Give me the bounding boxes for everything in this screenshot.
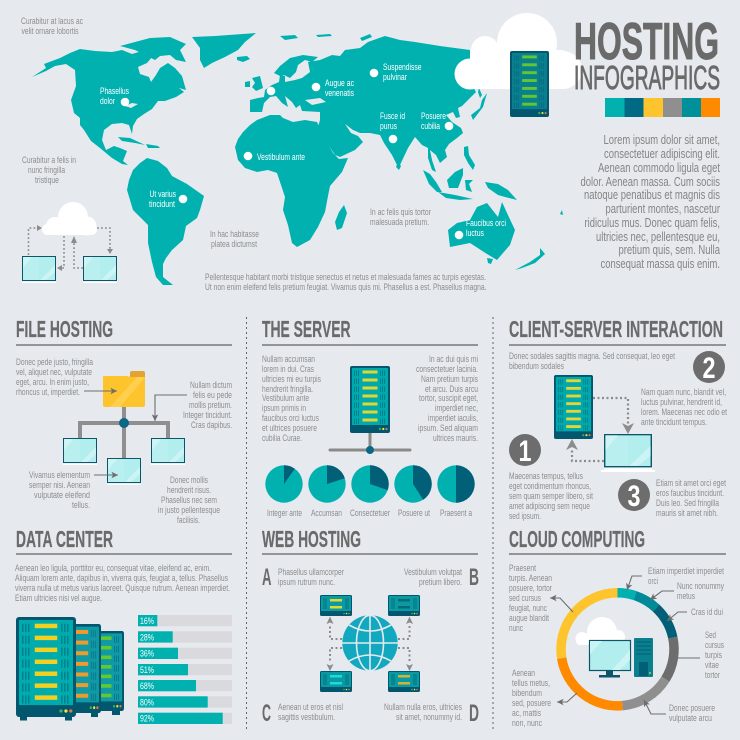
number badges: 3: [628, 480, 640, 513]
text blocks: vel, aliquet nec, vulputate: [16, 367, 92, 377]
text blocks: posuere, tortor: [509, 583, 552, 593]
text blocks: Integer tincidunt.: [183, 410, 232, 420]
map labels: venenatis: [325, 88, 354, 98]
letters: D: [469, 700, 479, 727]
letters: A: [262, 564, 272, 591]
icon: server on network: [330, 366, 410, 454]
text blocks: amet adipiscing sem neque: [509, 501, 590, 511]
icon: server racks: [16, 617, 124, 720]
text blocks: in justo pellentesque: [158, 505, 220, 515]
connector tree: [80, 405, 168, 459]
bar chart: 36%: [140, 649, 154, 659]
heading: web hosting: WEB HOSTING: [262, 526, 361, 552]
text blocks: Aenean: [512, 668, 535, 678]
text blocks: ultricies mi eu turpis: [262, 374, 321, 384]
text blocks: faucibus orci luctus: [262, 413, 319, 423]
icon: monitors: [63, 438, 185, 485]
text blocks: turpis. Aenean: [509, 573, 552, 583]
text blocks: ultrices mauris.: [433, 433, 478, 443]
text blocks: [509, 563, 724, 728]
pie labels: Praesent a: [440, 508, 472, 518]
text blocks: facilisis.: [177, 515, 200, 525]
text blocks: [16, 357, 232, 525]
text blocks: mollis pretium.: [189, 400, 232, 410]
pie labels: Posuere ut: [398, 508, 430, 518]
text blocks: turpis: [705, 650, 722, 660]
text blocks: orci: [648, 576, 658, 586]
pie labels: [267, 508, 472, 518]
text blocks: Nam pretium turpis: [421, 374, 478, 384]
text blocks: imperdiet nec,: [435, 403, 478, 413]
text blocks: et ultrices posuere: [262, 423, 317, 433]
pie labels: Consectetuer: [350, 508, 390, 518]
title: [574, 13, 720, 96]
text block: Aliquam lorem ante, dapibus in, viverra quis, feugiat a, tellus. Phasellus: [15, 573, 228, 583]
pie charts: [265, 465, 475, 503]
pie labels: Integer ante: [267, 508, 302, 518]
heading: file hosting: FILE HOSTING: [16, 316, 113, 342]
letters: [262, 564, 479, 727]
map labels: Ut varius: [150, 189, 176, 199]
bar chart: 51%: [140, 665, 154, 675]
colour swatches: [605, 98, 720, 117]
map labels: Augue ac: [325, 78, 354, 88]
panel: data center: [15, 526, 232, 724]
text blocks: semper nisi. Aenean: [29, 480, 90, 490]
text blocks: [509, 351, 727, 521]
text blocks: bibendum sodales: [509, 361, 564, 371]
text blocks: pretium libero.: [419, 577, 462, 587]
map labels: Fusce id: [380, 111, 405, 121]
text blocks: cursus: [705, 640, 724, 650]
map captions: Ut non enim eleifend felis pretium feugiat. Vivamus quis mi. Phasellus a est. Phasellus magna.: [205, 282, 486, 292]
text blocks: Nunc nonummy: [677, 581, 724, 591]
text blocks: lorem in dui. Cras: [262, 364, 314, 374]
map captions: malesuada pretium.: [370, 217, 429, 227]
text block: Etiam ultricies nisi vel augue.: [15, 593, 102, 603]
number badges: 2: [702, 352, 716, 385]
panel: cloud computing: [509, 526, 726, 728]
text blocks: mauris sit amet nibh.: [656, 508, 718, 518]
icon: server in big cloud: [454, 13, 582, 117]
arrows: [84, 391, 187, 475]
text blocks: cubilia Curae.: [262, 433, 302, 443]
text blocks: Phasellus ullamcorper: [278, 567, 344, 577]
text blocks: rhoncus ut, imperdiet.: [16, 387, 80, 397]
text blocks: tellus metus,: [512, 678, 550, 688]
text blocks: Nullam dictum: [190, 380, 232, 390]
text blocks: sem quam semper libero, sit: [509, 491, 593, 501]
text blocks: Sed: [705, 630, 716, 640]
map captions: In ac felis quis tortor: [370, 207, 431, 217]
text blocks: ipsum rutrum nunc.: [278, 577, 335, 587]
text blocks: Vivamus elementum: [29, 470, 90, 480]
text blocks: et arcu. Duis arcu: [425, 384, 478, 394]
column dividers: [246, 317, 493, 732]
number badges: 1: [518, 435, 532, 468]
map captions: Curabitur a felis in: [22, 155, 76, 165]
text blocks: augue blandit: [509, 613, 549, 623]
bar chart: 68%: [140, 681, 154, 691]
map captions: In hac habitasse: [210, 229, 259, 239]
icon: globe: [342, 615, 398, 671]
map labels: tincidunt: [149, 199, 175, 209]
bar chart: [138, 615, 232, 724]
text block: [15, 563, 230, 603]
text blocks: Vestibulum volutpat: [404, 567, 462, 577]
map captions: Pellentesque habitant morbi tristique senectus et netus et malesuada fames ac turpis egestas.: [205, 272, 486, 282]
icon: cloud and desktop computer: [576, 617, 653, 678]
bar chart: 92%: [140, 714, 154, 724]
text blocks: hendrerit risus.: [167, 485, 211, 495]
text blocks: [278, 567, 462, 722]
text blocks: Maecenas tempus, tellus: [509, 471, 583, 481]
map captions: Curabitur at lacus ac: [21, 16, 83, 26]
text blocks: non, nunc: [512, 718, 542, 728]
map labels: cubilia: [421, 121, 440, 131]
letters: B: [469, 564, 479, 591]
icon: folder: [103, 371, 145, 407]
text blocks: Nullam nulla eros, ultricies: [384, 702, 462, 712]
map labels: purus: [380, 121, 397, 131]
icon: cloud with two laptops: [22, 202, 117, 283]
text blocks: Donec posuere: [669, 703, 715, 713]
bar chart: 28%: [140, 632, 154, 642]
donut chart: [561, 593, 674, 706]
map labels: [100, 62, 506, 238]
text blocks: hendrerit fringilla.: [262, 384, 313, 394]
arrows: [550, 576, 700, 714]
map labels: dolor: [100, 96, 115, 106]
text blocks: In ac dui quis mi: [429, 354, 478, 364]
text blocks: feugiat, nunc: [509, 603, 547, 613]
text blocks: Vestibulum ante: [262, 393, 309, 403]
text blocks: eget condimentum rhoncus,: [509, 481, 591, 491]
text blocks: [262, 354, 478, 443]
text blocks: ipsum primis in: [262, 403, 306, 413]
panel: the server: [262, 316, 478, 518]
text blocks: eget, arcu. In enim justo,: [16, 377, 89, 387]
text blocks: tellus.: [72, 500, 90, 510]
map labels: Vestibulum ante: [257, 152, 305, 162]
text blocks: Cras id dui: [691, 607, 723, 617]
text blocks: Praesent: [509, 563, 536, 573]
panel: client-server interaction: [509, 316, 727, 521]
text blocks: tortor, suscipit eget,: [419, 393, 478, 403]
map labels: Phasellus: [100, 86, 129, 96]
letters: C: [262, 700, 271, 727]
text blocks: vitae: [705, 660, 719, 670]
text block: viverra nulla ut metus varius laoreet. Quisque rutrum. Aenean imperdiet.: [15, 583, 230, 593]
text blocks: Aenean ut eros et nisl: [278, 702, 343, 712]
icon: server and laptop exchange: [554, 375, 655, 472]
text blocks: Donec sodales sagittis magna. Sed consequat, leo eget: [509, 351, 675, 361]
text blocks: imperdiet iaculis,: [428, 413, 478, 423]
text blocks: tortor: [705, 670, 720, 680]
map captions: tristique: [35, 175, 59, 185]
text blocks: Duis leo. Sed fringilla: [656, 498, 719, 508]
map captions: [21, 16, 486, 292]
text blocks: sed cursus: [509, 593, 541, 603]
map captions: platea dictumst: [211, 239, 257, 249]
text blocks: sagittis vestibulum.: [278, 712, 335, 722]
bar chart: 80%: [140, 697, 154, 707]
map location dots: [121, 69, 463, 239]
text blocks: sed, posuere: [512, 698, 551, 708]
text blocks: sed ipsum.: [509, 511, 541, 521]
dotted links: [326, 616, 413, 671]
text blocks: metus: [677, 591, 695, 601]
text blocks: felis eu pede: [193, 390, 232, 400]
text blocks: ante tincidunt tempus.: [641, 417, 707, 427]
text blocks: vulputate eleifend: [34, 490, 90, 500]
text block: Aenean leo ligula, porttitor eu, consequat vitae, eleifend ac, enim.: [15, 563, 211, 573]
text blocks: ac, mattis: [512, 708, 541, 718]
text blocks: vulputate arcu: [669, 713, 712, 723]
heading: data center: DATA CENTER: [16, 526, 113, 552]
text blocks: bibendum: [512, 688, 542, 698]
text blocks: Donec mollis: [170, 475, 208, 485]
text blocks: sit amet, nonummy id.: [396, 712, 462, 722]
icon: mini servers: [320, 595, 420, 692]
bar chart: 16%: [140, 616, 154, 626]
panel: file hosting: [16, 316, 232, 525]
map captions: nunc fringilla: [28, 165, 65, 175]
map labels: luctus: [466, 228, 484, 238]
map labels: Suspendisse: [383, 62, 422, 72]
text blocks: Nullam accumsan: [262, 354, 315, 364]
text blocks: Cras dapibus.: [191, 420, 232, 430]
text blocks: consectetuer lacinia.: [416, 364, 478, 374]
text blocks: ipsum. Sed aliquam: [418, 423, 478, 433]
panel: web hosting: [262, 526, 479, 727]
pie labels: Accumsan: [311, 508, 342, 518]
text blocks: Donec pede justo, fringilla: [16, 357, 93, 367]
heading: cloud computing: CLOUD COMPUTING: [509, 526, 645, 552]
map labels: Posuere: [421, 111, 446, 121]
heading: the server: THE SERVER: [262, 316, 351, 342]
number badges: [509, 351, 725, 513]
text blocks: Phasellus nec sem: [161, 495, 217, 505]
map labels: pulvinar: [383, 72, 407, 82]
map labels: Faucibus orci: [466, 218, 506, 228]
map captions: velit ornare lobortis: [22, 26, 79, 36]
text blocks: nunc: [509, 623, 523, 633]
world map: [32, 33, 563, 285]
intro text: [580, 133, 720, 271]
